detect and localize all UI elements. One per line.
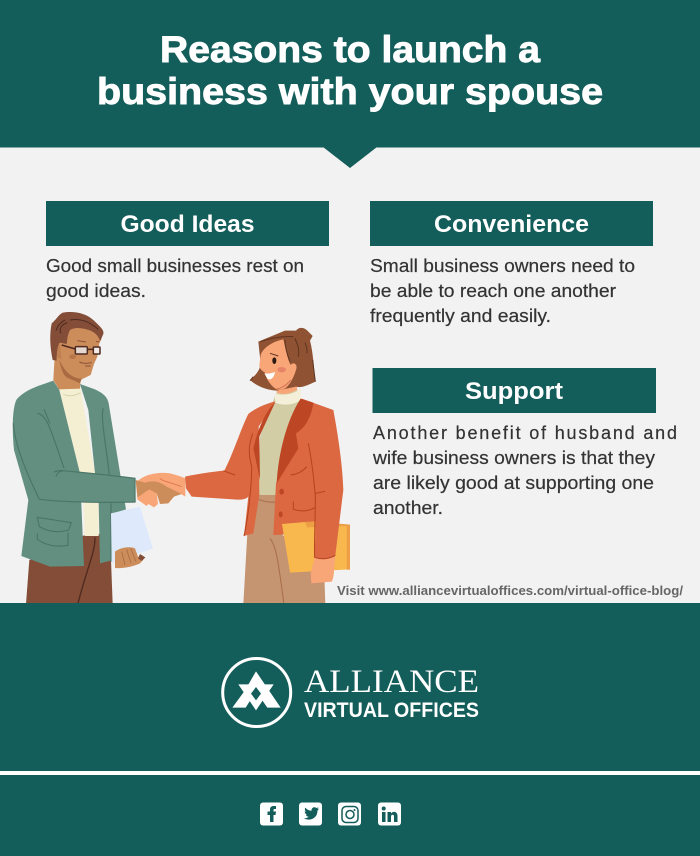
- folder: [282, 521, 350, 573]
- heading: convenience: Convenience: [434, 211, 589, 238]
- illustration: woman: [185, 328, 350, 604]
- text: good ideas: [46, 256, 304, 301]
- footer band: [0, 603, 700, 856]
- title: [97, 29, 603, 112]
- turtleneck: [275, 389, 301, 405]
- trousers: [243, 495, 325, 604]
- shirt: [58, 389, 99, 536]
- social icons: [260, 802, 401, 826]
- sleeve: [308, 410, 343, 559]
- logo wordmark: VIRTUAL OFFICES: [304, 699, 479, 722]
- text: support: [372, 423, 677, 518]
- heading: support: [372, 368, 656, 413]
- text: convenience: [370, 256, 635, 326]
- icon: instagram: [338, 802, 361, 826]
- heading: support: Support: [465, 378, 563, 405]
- text: convenience: be able to reach one another: [370, 281, 616, 301]
- hand on folder: [311, 555, 335, 583]
- icon: twitter: [299, 802, 322, 826]
- logo mark: [223, 658, 291, 726]
- heading: good ideas: [46, 201, 329, 246]
- text: support: are likely good at supporting one: [373, 473, 654, 493]
- text: support: Another benefit of husband and: [373, 423, 677, 443]
- neck: [53, 350, 81, 390]
- logo: [223, 658, 479, 726]
- illustration: man: [13, 312, 185, 604]
- neck: [277, 377, 297, 394]
- jacket: [185, 399, 337, 557]
- icon: facebook: [260, 802, 283, 826]
- trousers: [26, 533, 113, 604]
- title: business with your spouse: [97, 71, 603, 112]
- text: convenience: frequently and easily.: [370, 306, 551, 326]
- text: support: wife business owners is that they: [372, 448, 655, 468]
- panel: good ideas: [46, 201, 329, 301]
- heading: good ideas: Good Ideas: [120, 211, 254, 238]
- source url: Visit www.alliancevirtualoffices.com/virtual-office-blog/: [337, 584, 684, 598]
- top: [259, 388, 302, 495]
- head: [50, 312, 104, 383]
- text: good ideas: Good small businesses rest on: [46, 256, 304, 276]
- head: [250, 328, 315, 391]
- panel: support: [372, 368, 677, 518]
- text: good ideas: good ideas.: [46, 281, 146, 301]
- man's document: [111, 507, 153, 568]
- logo wordmark: ALLIANCE: [304, 664, 479, 700]
- panel: convenience: [370, 201, 653, 326]
- logo wordmark: [304, 664, 479, 722]
- text: convenience: Small business owners need to: [370, 256, 635, 276]
- jacket: [13, 381, 136, 567]
- icon: linkedin: [378, 802, 401, 826]
- heading: convenience: [370, 201, 653, 246]
- title: Reasons to launch a: [160, 29, 540, 70]
- text: support: another.: [373, 498, 443, 518]
- header banner: [0, 0, 700, 168]
- handshake: [136, 473, 185, 507]
